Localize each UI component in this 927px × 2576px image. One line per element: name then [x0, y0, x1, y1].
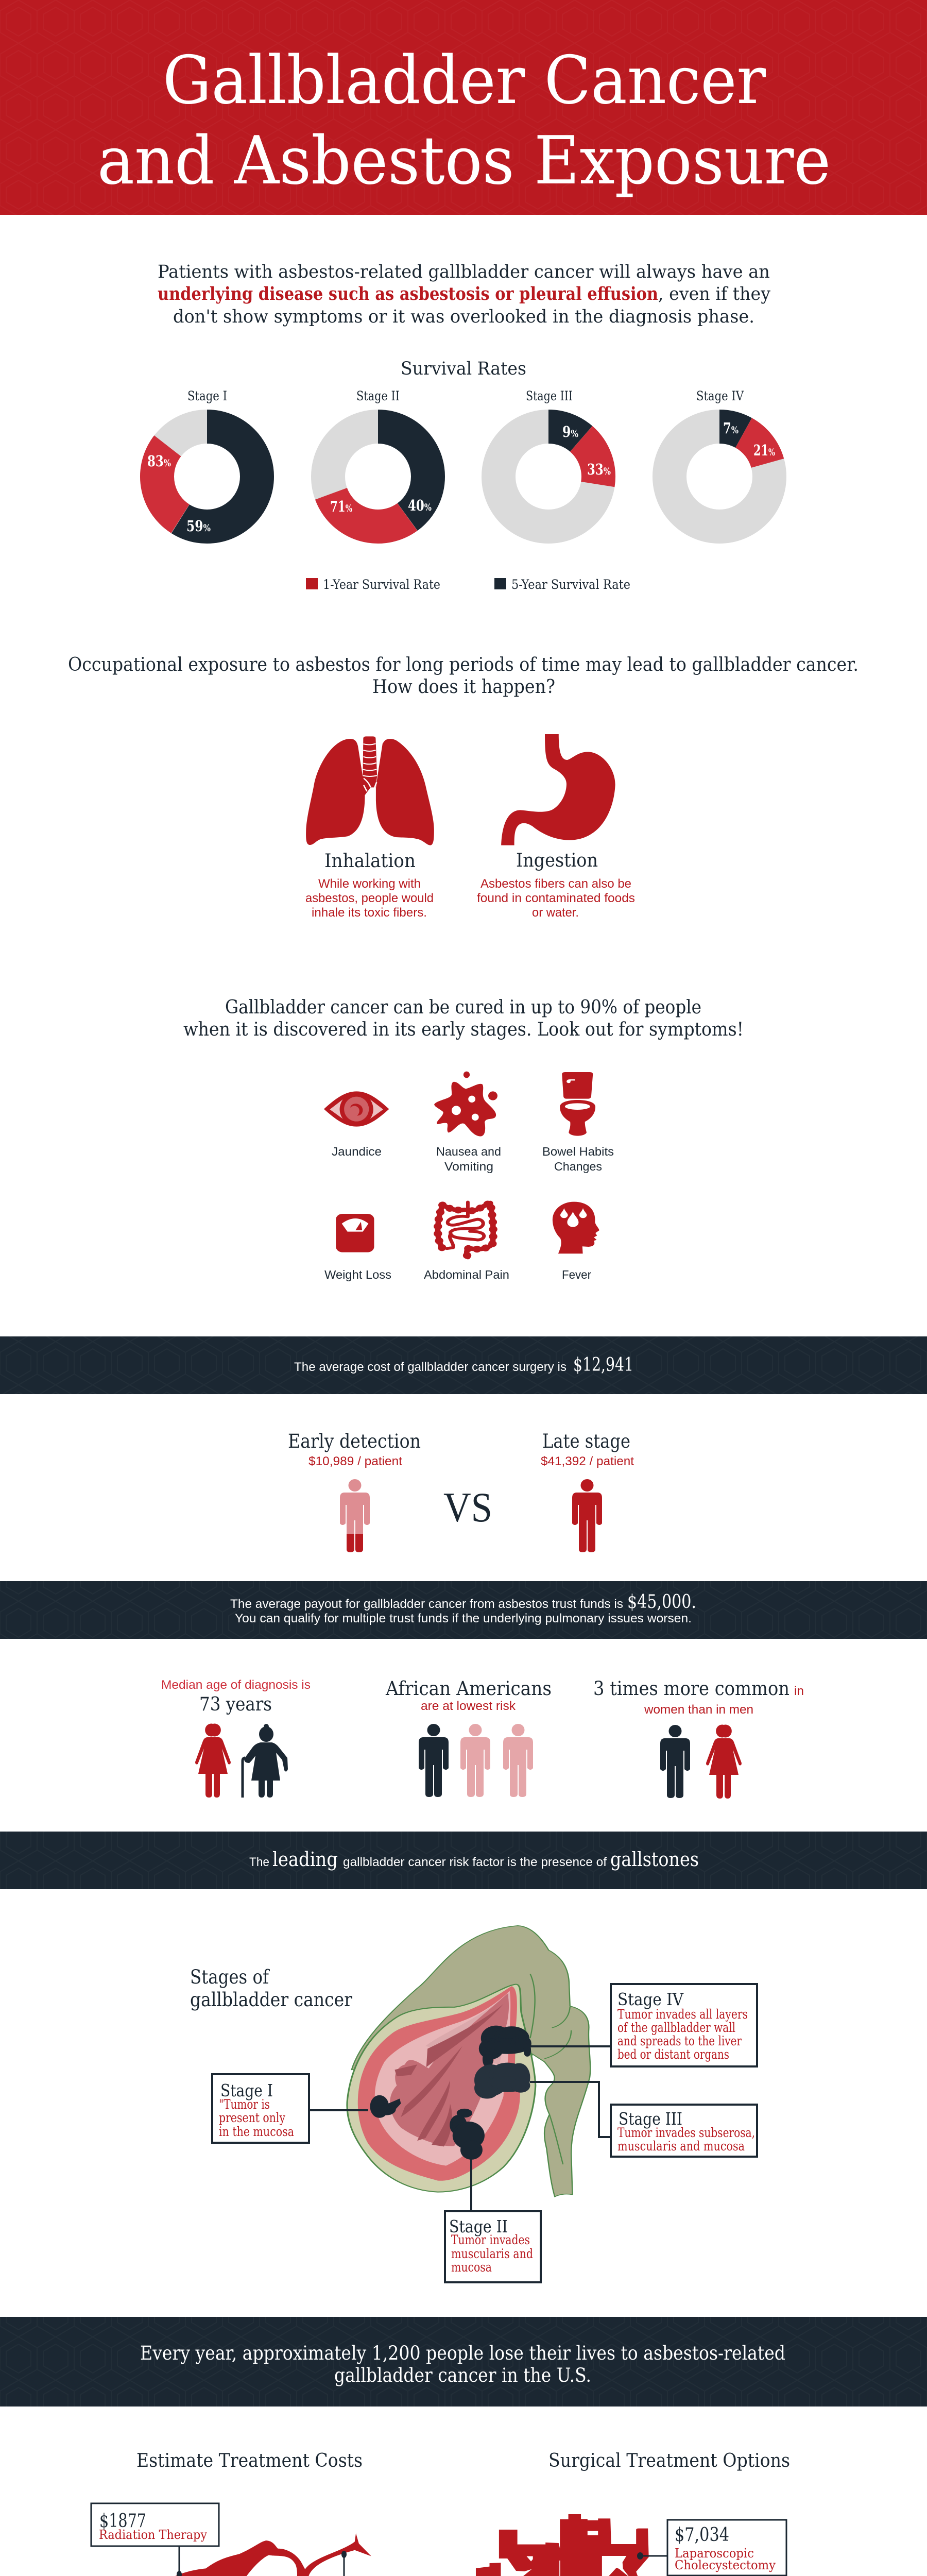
- icon: toilet: [560, 1072, 595, 1136]
- label: nausea and vomiting: [436, 1145, 501, 1173]
- icon: man: [660, 1725, 690, 1798]
- label: jaundice: Jaundice: [332, 1145, 382, 1158]
- cost: early detection: $10,989 / patient: [308, 1454, 402, 1468]
- panel: women vs men: [593, 1677, 804, 1799]
- heading: survival rates: Survival Rates: [401, 359, 526, 379]
- label: nausea and vomiting: Nausea and: [436, 1145, 501, 1158]
- donut: stage II: [308, 388, 448, 546]
- panel: ingestion: [477, 734, 635, 920]
- connector: stage II: [470, 2158, 472, 2211]
- description: inhalation: asbestos, people would: [305, 891, 434, 905]
- heading: stages of gallbladder cancer: [190, 1966, 352, 2011]
- donut: stage III: 9%: [562, 423, 578, 440]
- band: surgery cost: $12,941: [573, 1354, 633, 1376]
- icon: person early detection: [340, 1479, 370, 1552]
- callout: stage IV: [611, 1984, 757, 2066]
- legend: [306, 577, 630, 592]
- description: ingestion: or water.: [532, 906, 579, 920]
- intro paragraph: underlying disease such as asbestosis or pleural effusion: [158, 283, 658, 304]
- callout: stage I: "Tumor is: [219, 2097, 270, 2112]
- icon: dark man: [419, 1724, 449, 1797]
- donut: stage III: Stage III: [526, 388, 573, 403]
- legend: 1-Year Survival Rate: [323, 577, 440, 592]
- icon: gallbladder and bile duct: [134, 2533, 371, 2576]
- icon: woman: [706, 1725, 742, 1799]
- donut: stage I: 59%: [186, 517, 211, 535]
- panel: inhalation: [305, 736, 434, 920]
- panel: early detection vs late stage: [288, 1430, 634, 1552]
- panel: median age: 73 years: [199, 1694, 272, 1715]
- intro paragraph: don't show symptoms or it was overlooked in the diagnosis phase.: [173, 307, 754, 327]
- band: gallstones: gallbladder cancer risk factor is the presence of: [343, 1855, 607, 1869]
- heading: symptoms: Gallbladder cancer can be cured in up to 90% of people: [225, 997, 701, 1018]
- intro paragraph: Patients with asbestos-related gallbladder cancer will always have an: [158, 262, 770, 282]
- label: bowel habits changes: [542, 1145, 614, 1173]
- callout: stage II: Tumor invades: [451, 2232, 530, 2247]
- icon: stomach: [501, 734, 615, 845]
- donut: stage IV: 21%: [753, 442, 775, 459]
- callout: stage III: Stage III: [619, 2109, 682, 2129]
- callout: stage II: Stage II: [449, 2216, 508, 2236]
- callout: stage IV: Tumor invades all layers: [617, 2007, 748, 2022]
- callout: laparoscopic: [667, 2520, 786, 2575]
- callout: stage I: [212, 2074, 309, 2143]
- connector: laparoscopic: [637, 2552, 667, 2560]
- callout: radiation therapy: [91, 2503, 219, 2546]
- icon: pink man: [503, 1724, 533, 1797]
- description: ingestion: found in contaminated foods: [477, 891, 635, 905]
- description: inhalation: [305, 877, 434, 920]
- panel: african americans: are at lowest risk: [421, 1699, 516, 1713]
- title: Gallbladder Cancer: [163, 42, 766, 119]
- tumor: stage I: [371, 2096, 400, 2117]
- callout: stage III: [611, 2105, 757, 2157]
- callout: stage I: in the mucosa: [219, 2124, 294, 2139]
- icon: surgical robot: [476, 2514, 649, 2576]
- cost: late stage: $41,392 / patient: [541, 1454, 634, 1468]
- donut: stage IV: 7%: [723, 419, 739, 437]
- label: inhalation: Inhalation: [324, 851, 416, 872]
- panel: african americans: African Americans: [385, 1677, 552, 1700]
- donut: stage III: 33%: [587, 461, 611, 478]
- label: fever: Fever: [562, 1268, 591, 1281]
- callout: stage IV: of the gallbladder wall: [617, 2020, 735, 2035]
- donut: stage II: Stage II: [356, 388, 400, 403]
- illustration: gallbladder cross-section: [347, 1926, 590, 2197]
- panel: stages of gallbladder cancer: [190, 1926, 757, 2282]
- connector: stage I: [309, 2109, 368, 2111]
- label: weight loss: Weight Loss: [324, 1268, 391, 1281]
- panel: survival rates: [138, 359, 787, 592]
- band: gallstones: gallstones: [610, 1848, 699, 1871]
- donut: stage I: [138, 388, 276, 546]
- callout: stage II: [445, 2211, 541, 2282]
- band: payout: You can qualify for multiple trust funds if the underlying pulmonary issues worsen.: [235, 1612, 692, 1625]
- icon: lungs: [306, 736, 434, 845]
- callout: stage IV: Stage IV: [617, 1989, 684, 2009]
- heading: stages of gallbladder cancer: Stages of: [190, 1966, 270, 1988]
- callout: stage I: Stage I: [220, 2080, 273, 2100]
- icon: pink man: [460, 1724, 490, 1797]
- heading: occupational exposure: [68, 654, 859, 698]
- callout: stage II: muscularis and: [451, 2246, 533, 2261]
- panel: median age: Median age of diagnosis is: [161, 1678, 311, 1692]
- donut: stage IV: [651, 388, 787, 545]
- icon: eye: [324, 1091, 389, 1127]
- donut: stage I: 83%: [147, 452, 171, 470]
- title: and Asbestos Exposure: [97, 123, 831, 199]
- band: gallstones: [0, 1832, 927, 1889]
- callout: stage III: muscularis and mucosa: [617, 2139, 745, 2154]
- donut: stage I: Stage I: [187, 388, 227, 403]
- label: ingestion: Ingestion: [516, 850, 598, 871]
- icon: elderly woman with cane: [243, 1724, 288, 1798]
- panel: women vs men: 3 times more common: [593, 1677, 789, 1700]
- band: annual deaths: gallbladder cancer in the U.S.: [334, 2364, 591, 2386]
- heading: estimate treatment costs: Estimate Treatment Costs: [136, 2450, 363, 2471]
- callout: laparoscopic: Cholecystectomy: [675, 2558, 776, 2572]
- panel: symptoms: [324, 1072, 614, 1281]
- heading: stages of gallbladder cancer: gallbladder cancer: [190, 1989, 352, 2011]
- title: [97, 42, 831, 199]
- callout: stage I: present only: [219, 2110, 286, 2125]
- callout: laparoscopic: $7,034: [675, 2524, 729, 2546]
- icon: fever head: [553, 1202, 599, 1253]
- band: gallstones: leading: [272, 1848, 338, 1871]
- label: nausea and vomiting: Vomiting: [444, 1160, 493, 1173]
- panel: women vs men: in: [794, 1684, 804, 1698]
- heading: symptoms: when it is discovered in its early stages. Look out for symptoms!: [183, 1019, 744, 1040]
- label: bowel habits changes: Bowel Habits: [542, 1145, 614, 1158]
- legend: 5-Year Survival Rate: [511, 577, 630, 592]
- donut: stage IV: Stage IV: [696, 388, 744, 403]
- icon: vomit splat: [434, 1072, 497, 1137]
- label: late stage: Late stage: [542, 1430, 630, 1452]
- donut: stage III: [478, 388, 619, 547]
- panel: surgical treatment options: [476, 2450, 847, 2576]
- callout: stage III: Tumor invades subserosa,: [617, 2125, 755, 2140]
- panel: estimate treatment costs: [91, 2450, 434, 2576]
- description: ingestion: [477, 877, 635, 920]
- band: surgery cost: The average cost of gallbladder cancer surgery is: [294, 1360, 566, 1374]
- callout: stage IV: bed or distant organs: [617, 2047, 729, 2062]
- intro paragraph: [158, 262, 770, 327]
- callout: stage IV: and spreads to the liver: [617, 2033, 742, 2048]
- heading: symptoms: [183, 997, 744, 1040]
- connector: radiation: [177, 2546, 182, 2576]
- tumor: stage III: [476, 2064, 528, 2097]
- donut: stage II: 71%: [330, 498, 352, 515]
- label: early detection: Early detection: [288, 1430, 421, 1452]
- callout: laparoscopic: Laparoscopic: [675, 2546, 754, 2561]
- tumor: stage II: [451, 2109, 484, 2159]
- header banner: [0, 0, 927, 215]
- heading: occupational exposure: How does it happen?: [372, 676, 555, 698]
- callout: radiation therapy: $1877: [99, 2511, 146, 2532]
- band: annual deaths: [0, 2317, 927, 2406]
- connector: stage III: [530, 2082, 611, 2137]
- connector: stage IV: [530, 2045, 611, 2047]
- band: payout: The average payout for gallbladder cancer from asbestos trust funds is: [230, 1597, 623, 1611]
- description: ingestion: Asbestos fibers can also be: [480, 877, 631, 891]
- callout: radiation therapy: Radiation Therapy: [99, 2528, 207, 2542]
- vs text: VS: [443, 1484, 492, 1531]
- intro paragraph: , even if they: [658, 284, 770, 304]
- icon: intestines: [438, 1202, 493, 1257]
- heading: surgical treatment options: Surgical Treatment Options: [548, 2450, 790, 2471]
- tumor: stage IV: [481, 2027, 529, 2066]
- connector: chemotherapy: [341, 2551, 347, 2576]
- description: inhalation: inhale its toxic fibers.: [312, 906, 427, 920]
- band: payout: [0, 1581, 927, 1639]
- band: annual deaths: Every year, approximately 1,200 people lose their lives to asbestos-related: [140, 2342, 785, 2364]
- label: abdominal pain: Abdominal Pain: [424, 1268, 509, 1281]
- icon: woman: [195, 1724, 231, 1798]
- band: payout: $45,000.: [627, 1591, 696, 1613]
- band: gallstones: The: [249, 1855, 269, 1869]
- label: bowel habits changes: Changes: [554, 1160, 602, 1173]
- heading: occupational exposure: Occupational exposure to asbestos for long periods of time may lead to gallbladder cancer.: [68, 654, 859, 675]
- description: inhalation: While working with: [318, 877, 421, 891]
- callout: stage II: mucosa: [451, 2260, 492, 2275]
- icon: weight scale: [336, 1214, 374, 1252]
- donut: stage II: 40%: [408, 497, 432, 514]
- panel: median age: [161, 1678, 311, 1798]
- panel: women vs men: women than in men: [644, 1703, 753, 1717]
- panel: african americans: [385, 1677, 552, 1797]
- band: surgery cost: [0, 1336, 927, 1394]
- icon: person late stage: [572, 1479, 602, 1552]
